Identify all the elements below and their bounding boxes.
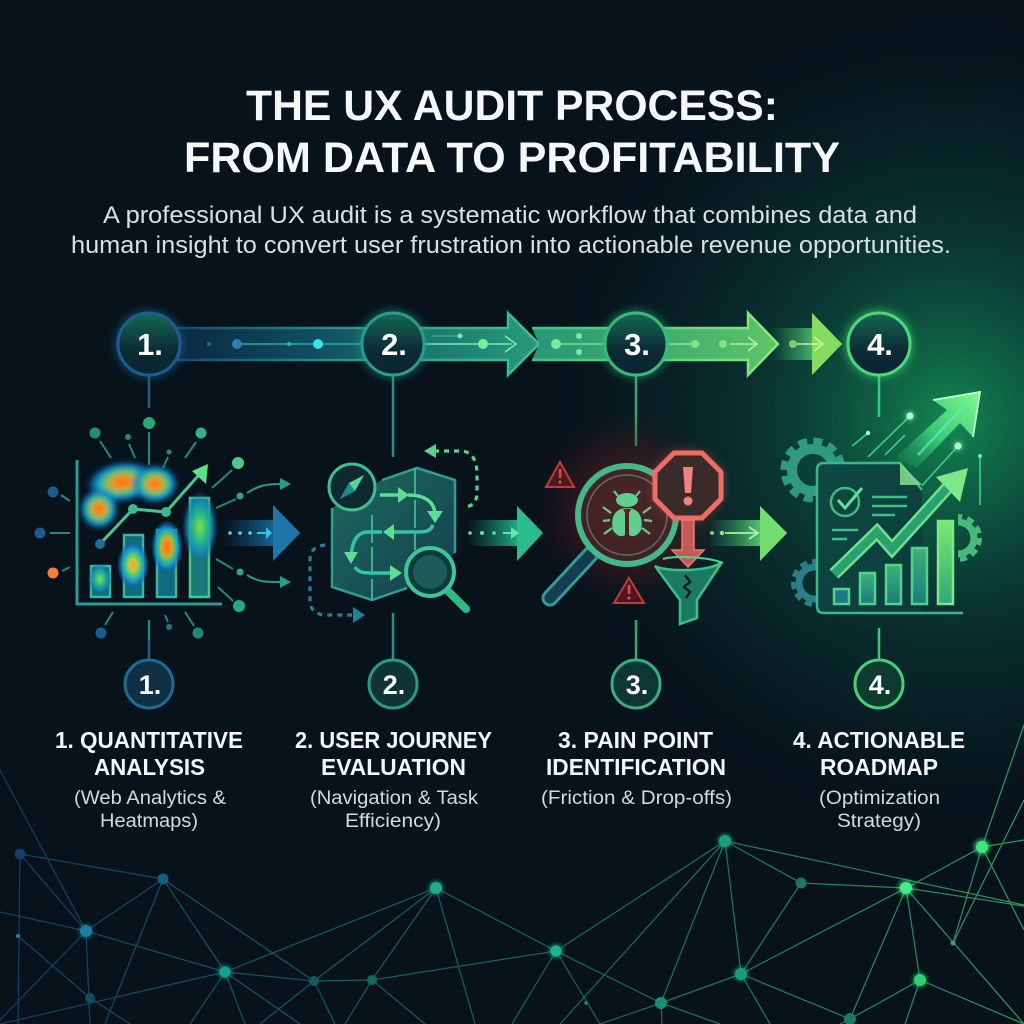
label: step 1: Heatmaps) <box>100 811 198 832</box>
octagon alert <box>654 452 722 519</box>
label: step 4: (Optimization <box>819 788 940 809</box>
top step badge 1 <box>116 311 182 377</box>
label: step 1: 1. QUANTITATIVE <box>55 727 243 753</box>
route arrows <box>351 495 435 573</box>
label: step 2 <box>295 727 492 832</box>
label: step 3: 3. PAIN POINT <box>558 727 713 753</box>
label: step 2: (Navigation & Task <box>310 788 479 809</box>
icon: analytics chart with heatmap <box>34 417 291 640</box>
satellite dots <box>143 417 155 429</box>
satellite spokes <box>50 432 236 640</box>
subtitle <box>71 202 951 259</box>
top step badge 2: 2. <box>381 327 407 362</box>
heat blobs <box>79 456 179 530</box>
band with arrowhead from step 1 to 2 <box>175 313 539 375</box>
sparkle streaks <box>852 416 980 505</box>
bottom step badge 1: 1. <box>139 670 161 700</box>
growth arrow large <box>895 392 980 468</box>
label: step 3: (Friction & Drop-offs) <box>541 788 732 809</box>
label: step 3 <box>541 727 732 809</box>
label: step 4: ROADMAP <box>820 754 938 780</box>
top step badge 3 <box>603 311 669 377</box>
broken funnel <box>655 562 722 624</box>
bars <box>834 521 953 604</box>
final arrow to step 4 <box>770 313 842 375</box>
label: step 1: (Web Analytics & <box>74 788 226 809</box>
gears <box>784 441 979 604</box>
icon: actionable roadmap <box>784 392 982 613</box>
arrow 3 to 4 <box>708 506 787 561</box>
band from step 2 to 3 arrow <box>532 313 778 375</box>
bars <box>91 498 209 597</box>
label: step 2: 2. USER JOURNEY <box>295 727 492 753</box>
title <box>184 82 840 182</box>
small warning triangles <box>546 462 644 603</box>
arrow 1 to 2 <box>223 505 300 561</box>
subtitle: human insight to convert user frustration into actionable revenue opportunities. <box>71 232 951 259</box>
icon: user journey map <box>310 444 477 623</box>
network nodes <box>14 834 990 1024</box>
band dots and lines <box>237 336 823 352</box>
bottom step badge 1 <box>125 660 173 708</box>
label: step 1 <box>55 727 243 832</box>
bottom step badge 4: 4. <box>869 670 891 700</box>
bottom step badge 3 <box>612 660 660 708</box>
title: FROM DATA TO PROFITABILITY <box>184 134 840 182</box>
icon: pain point magnifier and bug <box>532 412 728 624</box>
label: step 4 <box>793 727 965 832</box>
top step badge 3: 3. <box>624 327 650 362</box>
subtitle: A professional UX audit is a systematic workflow that combines data and <box>103 202 917 229</box>
top step badge 4: 4. <box>867 327 893 362</box>
axes <box>77 460 222 604</box>
bottom step badge 2: 2. <box>383 670 405 700</box>
magnifier lens <box>578 466 676 564</box>
map sheets <box>332 468 455 600</box>
magnifier handle <box>550 555 590 598</box>
zigzag growth arrow <box>834 485 950 574</box>
top process arrows <box>175 313 842 375</box>
top step badge 2 <box>360 311 426 377</box>
bug <box>603 491 652 536</box>
top step badge 1: 1. <box>137 327 163 362</box>
red glow <box>532 412 728 608</box>
bottom step badge 4 <box>855 660 903 708</box>
top step badge 4 <box>846 311 912 377</box>
small curved arrows <box>247 484 280 582</box>
background network <box>0 725 1024 1024</box>
dashed loops <box>310 451 477 615</box>
label: step 2: Efficiency) <box>345 811 441 832</box>
arrow 2 to 3 <box>467 506 543 561</box>
checklist <box>831 488 859 516</box>
title: THE UX AUDIT PROCESS: <box>246 82 778 130</box>
down arrow <box>672 520 704 567</box>
document <box>817 463 922 613</box>
compass <box>329 464 375 510</box>
trend line <box>100 468 205 544</box>
label: step 1: ANALYSIS <box>94 754 205 780</box>
label: step 2: EVALUATION <box>321 754 466 780</box>
label: step 4: 4. ACTIONABLE <box>793 727 965 753</box>
label: step 4: Strategy) <box>837 811 921 832</box>
label: step 3: IDENTIFICATION <box>546 754 726 780</box>
bottom step badge 2 <box>369 660 417 708</box>
magnifier <box>447 590 466 609</box>
bottom step badge 3: 3. <box>626 670 648 700</box>
connectors <box>149 375 879 660</box>
